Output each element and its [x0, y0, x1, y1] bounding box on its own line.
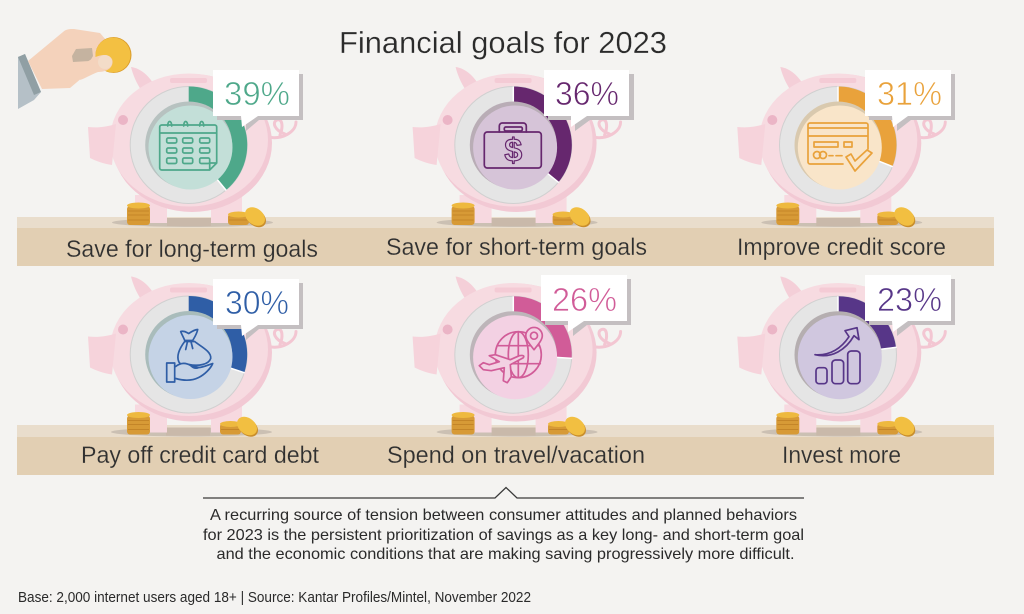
callout 30%: 30% — [225, 284, 289, 321]
icon: briefcase with dollar sign: $ — [504, 132, 522, 168]
ground shadow — [761, 428, 922, 436]
callout 39% — [213, 70, 303, 131]
piggy bank — [413, 67, 621, 223]
ground shadow — [761, 218, 922, 227]
coin stacks — [452, 202, 594, 231]
icon: rising bars and arrow — [815, 328, 860, 384]
ground shadow — [111, 428, 272, 436]
coin stacks — [776, 412, 919, 441]
label: Save for long-term goals — [66, 236, 318, 263]
piggy bank — [737, 67, 945, 223]
callout 31% — [865, 70, 955, 131]
commentary text: A recurring source of tension between consumer attitudes and planned behaviors — [210, 507, 797, 524]
callout 26%: 26% — [552, 281, 617, 318]
donut chart 31% — [780, 86, 896, 204]
label: Invest more — [782, 442, 901, 469]
piggy bank — [737, 276, 945, 432]
source note: Base: 2,000 internet users aged 18+ | Source: Kantar Profiles/Mintel, November 2022 — [18, 590, 531, 606]
donut chart 23% — [780, 296, 897, 413]
shelf: top row — [17, 217, 994, 266]
commentary text — [203, 507, 804, 563]
callout 23%: 23% — [877, 281, 942, 318]
panel: pay off credit card debt — [81, 276, 319, 469]
coin stacks — [127, 412, 262, 441]
coin stacks — [452, 412, 590, 441]
coin stacks — [776, 202, 919, 231]
callout 30% — [213, 279, 303, 340]
label: Pay off credit card debt — [81, 442, 319, 469]
shelf: bottom row — [17, 425, 994, 475]
ground shadow — [437, 428, 598, 436]
callout 23% — [865, 275, 955, 336]
label: Improve credit score — [737, 234, 946, 261]
piggy bank — [413, 276, 621, 432]
donut chart 36% — [455, 86, 572, 204]
panel: spend on travel/vacation — [387, 275, 645, 469]
title: Financial goals for 2023 — [339, 25, 667, 60]
piggy bank — [88, 276, 296, 432]
icon: calendar — [160, 122, 217, 170]
illustration: hand dropping coin — [18, 29, 132, 109]
ground shadow — [112, 218, 273, 227]
panel: save for long-term goals — [66, 67, 318, 263]
piggy bank — [88, 67, 296, 223]
donut chart 39% — [130, 86, 247, 204]
panel: improve credit score — [737, 67, 955, 261]
donut chart 30% — [130, 296, 247, 413]
callout 31%: 31% — [877, 75, 942, 112]
donut chart 26% — [455, 296, 572, 413]
callout 36% — [544, 70, 634, 131]
callout 36%: 36% — [555, 75, 619, 112]
divider with notch — [203, 488, 804, 498]
panel: save for short-term goals — [386, 67, 647, 261]
label: Save for short-term goals — [386, 234, 647, 261]
icon: globe, plane and map pin — [479, 327, 542, 383]
callout 26% — [541, 275, 631, 336]
icon: hand holding money bag — [167, 330, 213, 382]
commentary text: and the economic conditions that are making saving progressively more difficult. — [216, 546, 794, 563]
coin stacks — [127, 202, 270, 231]
callout 39%: 39% — [224, 75, 290, 112]
commentary text: for 2023 is the persistent prioritization of savings as a key long- and short-term goal — [203, 527, 804, 544]
label: Spend on travel/vacation — [387, 442, 645, 469]
ground shadow — [437, 218, 598, 227]
panel: invest more — [737, 275, 955, 469]
icon: credit card with check — [808, 123, 872, 171]
